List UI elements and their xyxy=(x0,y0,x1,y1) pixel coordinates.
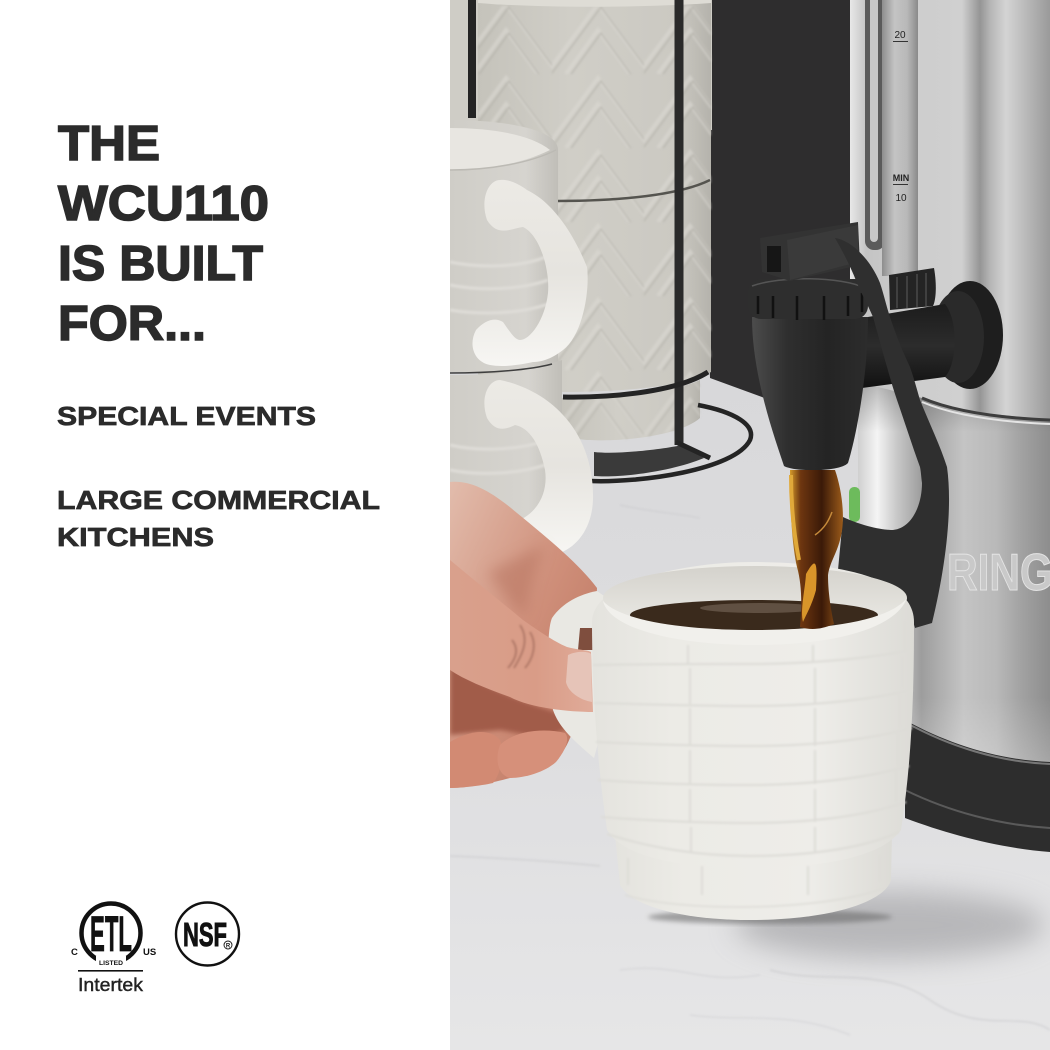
use case: large commercial kitchens: KITCHENS xyxy=(57,522,214,552)
shadow between thumb and fingers xyxy=(450,670,565,737)
cap xyxy=(784,222,860,280)
horizontal pipe xyxy=(862,304,955,388)
hand holding mug xyxy=(450,482,610,788)
ETL Intertek certification mark: C xyxy=(71,947,78,958)
white mug handle, front xyxy=(548,591,604,758)
coffee surface xyxy=(604,598,907,636)
photo: coffee being poured from urn into mug xyxy=(450,0,1050,1050)
valve body xyxy=(752,317,868,470)
gauge tube with markings xyxy=(882,0,918,276)
lower left mug xyxy=(450,360,593,553)
dark wall xyxy=(710,0,850,398)
gauge tube with markings: MIN xyxy=(893,173,909,183)
title: IS BUILT xyxy=(58,237,263,291)
use case: large commercial kitchens xyxy=(57,485,380,552)
NSF certification mark: NSF xyxy=(183,916,227,953)
sight glass xyxy=(865,0,882,250)
mounting flange xyxy=(948,281,1003,389)
stacked patterned mugs xyxy=(450,0,712,440)
front white mug xyxy=(592,562,914,920)
green indicator xyxy=(849,487,860,522)
black spigot xyxy=(748,222,1003,628)
title: WCU110 xyxy=(58,177,269,231)
coffee stream xyxy=(790,470,843,629)
mug shadow on counter xyxy=(735,891,1045,959)
strap and tab xyxy=(835,238,949,628)
inner wall xyxy=(603,566,907,606)
NSF certification mark: R xyxy=(226,944,231,950)
thumbnail xyxy=(566,652,592,702)
ETL Intertek certification mark xyxy=(71,904,156,995)
gauge tube with markings: 10 xyxy=(895,193,907,204)
knurled ring xyxy=(748,279,868,319)
ETL Intertek certification mark: LISTED xyxy=(99,961,124,967)
urn lower body xyxy=(858,385,1050,775)
body xyxy=(592,562,914,835)
gauge tube with markings: 20 xyxy=(894,30,906,41)
brick relief pattern xyxy=(593,620,912,907)
collar xyxy=(889,268,936,310)
use case: large commercial kitchens: LARGE COMMERCIAL xyxy=(57,485,380,515)
thumb xyxy=(450,560,593,712)
front left mug xyxy=(450,120,558,372)
use case: special events: SPECIAL EVENTS xyxy=(57,401,316,431)
front left mug handle xyxy=(472,180,588,366)
wire mug rack xyxy=(472,0,751,481)
foot xyxy=(660,840,892,920)
ETL Intertek certification mark: US xyxy=(143,947,156,958)
title: FOR... xyxy=(58,297,206,351)
back of hand and fingers xyxy=(450,482,597,788)
ETL Intertek certification mark: Intertek xyxy=(78,975,144,995)
title: THE xyxy=(58,117,160,171)
urn base xyxy=(905,720,1050,852)
curled fingers xyxy=(450,732,502,788)
stainless steel urn xyxy=(849,0,1050,852)
title xyxy=(58,117,269,351)
ETL Intertek certification mark: ETL xyxy=(90,906,132,962)
crease near index finger xyxy=(490,550,540,610)
urn upper body xyxy=(850,0,1050,419)
knuckle wrinkles xyxy=(508,625,534,668)
lower mug handle xyxy=(484,380,593,553)
left text panel xyxy=(0,0,450,1050)
marble counter xyxy=(450,370,1050,1050)
NSF certification mark xyxy=(176,902,239,966)
